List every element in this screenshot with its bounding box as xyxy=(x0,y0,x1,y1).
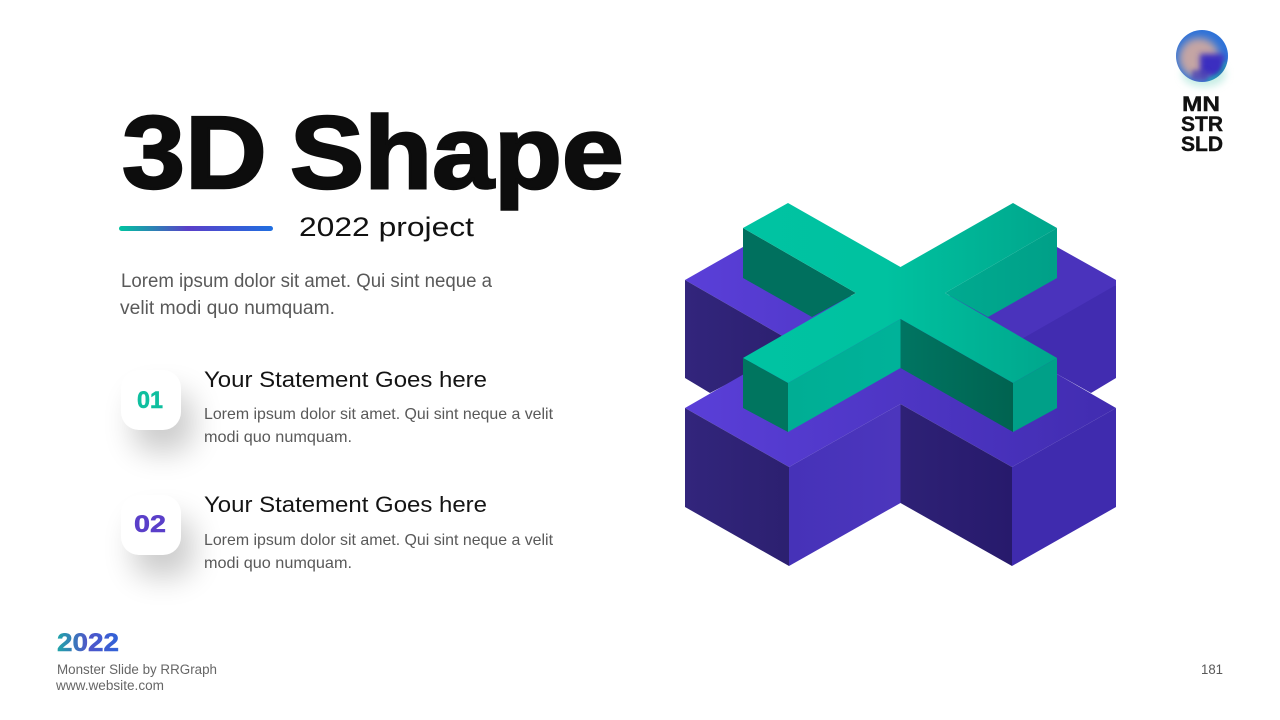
statement 02 text: modi quo numquam. xyxy=(204,555,352,572)
footer credits xyxy=(55,662,217,693)
intro paragraph: Lorem ipsum dolor sit amet. Qui sint neque a xyxy=(121,271,492,292)
intro paragraph: velit modi quo numquam. xyxy=(120,298,335,319)
logo wordmark: MN xyxy=(1182,93,1220,116)
purple base: back blocks xyxy=(685,247,1116,393)
statement 01 text: Lorem ipsum dolor sit amet. Qui sint neque a velit xyxy=(204,406,554,423)
logo sphere xyxy=(1176,30,1228,87)
title: Shape xyxy=(290,95,624,210)
subtitle: 2022 project xyxy=(299,212,475,242)
statement 02 heading: Your Statement Goes here xyxy=(204,492,487,517)
logo wordmark: SLD xyxy=(1181,133,1223,156)
footer year: 2022 xyxy=(57,629,119,657)
title: 3D xyxy=(122,95,267,210)
logo xyxy=(1176,30,1228,156)
badge 02 xyxy=(121,495,193,577)
badge 01 xyxy=(121,370,193,452)
statement 02 xyxy=(121,492,554,577)
statement 02 text: Lorem ipsum dolor sit amet. Qui sint neque a velit xyxy=(204,532,554,549)
green cross xyxy=(743,203,1057,432)
logo wordmark: STR xyxy=(1181,113,1223,136)
purple base: front blocks xyxy=(685,284,1116,566)
intro paragraph xyxy=(120,271,492,319)
badge 01: 01 xyxy=(137,387,163,414)
page number: 181 xyxy=(1201,661,1223,677)
statement 01 heading: Your Statement Goes here xyxy=(204,367,487,392)
statement 01 xyxy=(121,367,554,452)
footer credits: www.website.com xyxy=(55,678,164,693)
statement 02 text xyxy=(204,532,554,572)
statement 01 text xyxy=(204,406,554,446)
statement 01 text: modi quo numquam. xyxy=(204,429,352,446)
logo wordmark xyxy=(1181,93,1223,156)
badge 02: 02 xyxy=(134,511,166,538)
title xyxy=(122,95,624,210)
3D cross illustration xyxy=(685,203,1116,566)
gradient rule xyxy=(119,226,273,231)
footer credits: Monster Slide by RRGraph xyxy=(57,662,217,677)
